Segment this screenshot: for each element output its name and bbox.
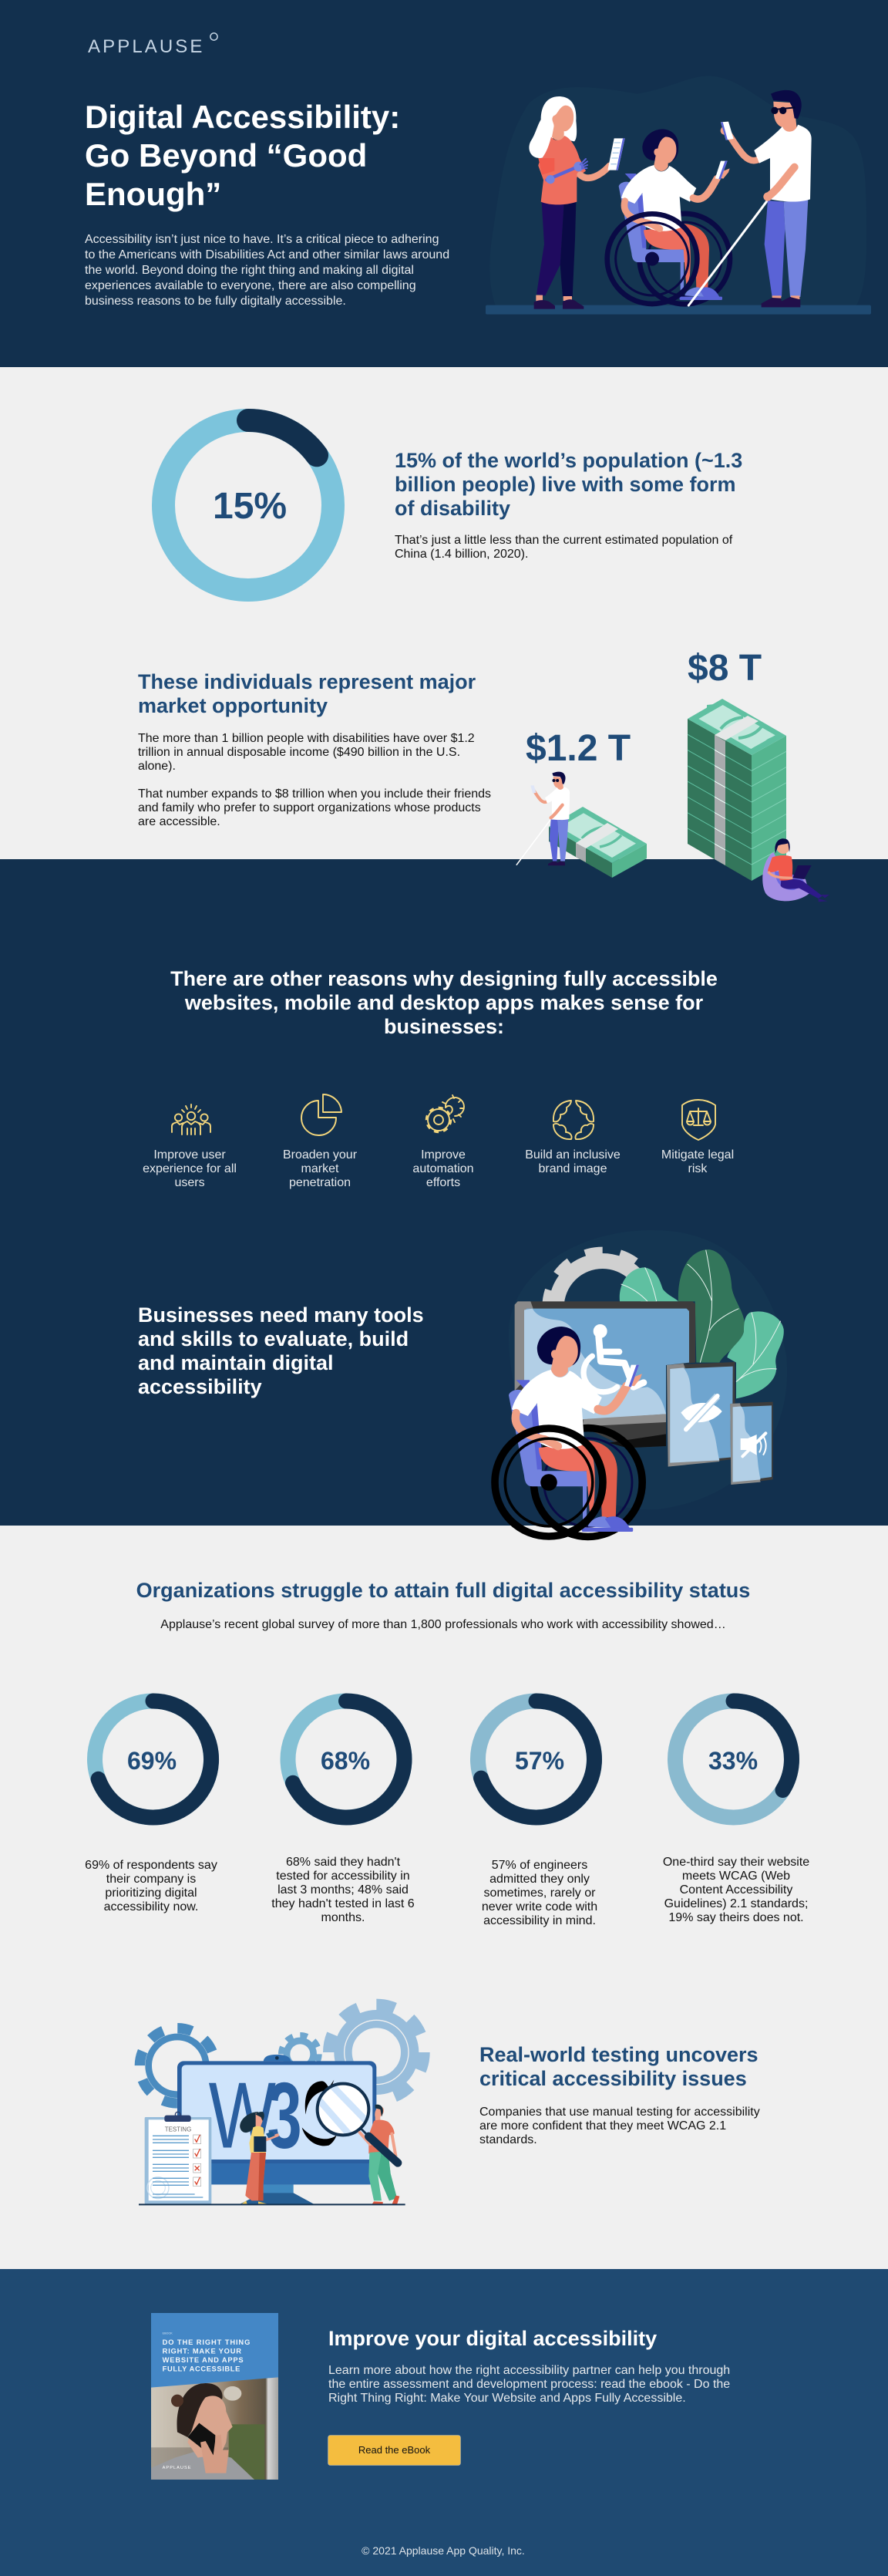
heading: tools and skills: accessibility: [138, 1375, 262, 1398]
figure: wheelchair user: [495, 1327, 642, 1536]
heading: market opportunity: market opportunity: [138, 694, 328, 717]
intro text: to the Americans with Disabilities Act and other similar laws around: [85, 248, 449, 261]
label: automation: Improve: [421, 1148, 466, 1162]
label: legal risk: [661, 1148, 734, 1175]
caption: 57%: [482, 1859, 597, 1927]
white cane: [688, 201, 767, 305]
heading: population: [395, 449, 742, 520]
heading: tools and skills: [138, 1303, 424, 1398]
caption: 57%: 57% of engineers: [492, 1859, 587, 1871]
illustration: small money stack: [549, 807, 647, 878]
label: user experience: [143, 1148, 237, 1189]
clipboard: TESTING: [165, 2126, 191, 2133]
gear: left: [140, 2028, 215, 2103]
text: manual testing: standards.: [479, 2133, 537, 2146]
heading: market opportunity: These individuals represent major: [138, 670, 476, 693]
background blob: [509, 1230, 787, 1509]
gear: middle: [281, 2035, 319, 2073]
label: brand image: [525, 1148, 621, 1175]
icon: eye slash: [681, 1403, 722, 1422]
icon: applause logo ring: [210, 33, 217, 40]
icon: shield with scales: [682, 1100, 715, 1140]
intro text: business reasons to be fully digitally accessible.: [85, 295, 346, 307]
logo: APPLAUSE: [88, 36, 205, 57]
icon: inclusive hands: [553, 1101, 594, 1139]
cover text: EBOOK: [163, 2332, 173, 2335]
donut chart: 68 percent: [288, 1701, 404, 1817]
panel: hero: [0, 0, 888, 367]
caption: 33%: Content Accessibility: [680, 1883, 792, 1896]
far wheel: [640, 214, 730, 304]
icon: gears: [426, 1095, 464, 1132]
man with magnifier: [360, 2105, 399, 2204]
illustration: W3C testing: [139, 2004, 424, 2204]
text: market opportunity: The more than 1 billion people with disabilities have over $1.2: [138, 731, 475, 745]
label: automation: efforts: [426, 1175, 460, 1189]
heading: improve your accessibility: Improve your digital accessibility: [328, 2327, 657, 2350]
near wheel: [607, 214, 697, 304]
caption: 57%: accessibility in mind.: [483, 1914, 596, 1927]
caption: 33%: 19% say theirs does not.: [668, 1911, 804, 1924]
text: manual testing: Companies that use manual testing for accessibility: [479, 2106, 760, 2118]
text: manual testing: [479, 2106, 760, 2146]
donut value: 33%: 33%: [708, 1747, 758, 1775]
ebook cover: FULLY ACCESSIBLE: [163, 2365, 240, 2373]
caption: 57%: never write code with: [482, 1900, 597, 1913]
magnifying glass: [316, 2082, 370, 2138]
heading: tools and skills: and maintain digital: [138, 1351, 334, 1374]
label: legal risk: Mitigate legal: [661, 1148, 734, 1162]
label: user experience: Improve user: [153, 1148, 226, 1162]
ebook cover: APPLAUSE: [163, 2466, 192, 2470]
label: brand image: Build an inclusive: [525, 1148, 621, 1162]
gear: right: [329, 2004, 424, 2100]
heading: organizations struggle: Organizations struggle to attain full digital accessibility status: [136, 1579, 750, 1602]
donut chart: 69 percent: [95, 1701, 211, 1818]
caption: 69%: accessibility now.: [104, 1900, 198, 1913]
value: $1.2 T: $1.2 T: [526, 728, 631, 769]
text: population comparison: That’s just a little less than the current estimated population of: [395, 534, 732, 546]
panel: call to action: [0, 2269, 888, 2576]
illustration: large money stack: [688, 699, 786, 881]
ebook cover: [151, 2313, 278, 2480]
label: user experience: users: [174, 1175, 205, 1189]
heading: real-world testing: [479, 2043, 758, 2090]
caption: 68%: last 3 months; 48% said: [278, 1883, 409, 1896]
heading: other reasons: There are other reasons why designing fully accessible: [170, 967, 718, 990]
label: automation: automation: [412, 1162, 474, 1175]
text: call to action: Right Thing Right: Make Your Website and Apps Fully Accessible.: [328, 2391, 686, 2405]
heading: other reasons: businesses:: [384, 1015, 504, 1038]
tablet: [667, 1362, 735, 1467]
label: market penetration: penetration: [289, 1175, 351, 1189]
label: user experience: experience for all: [143, 1162, 237, 1175]
title: Go Beyond “Good: [85, 137, 367, 173]
monitor: [177, 2055, 376, 2204]
woman with prosthetic arm: [529, 96, 625, 309]
donut value: 15%: 15%: [213, 486, 287, 527]
monitor: [515, 1301, 695, 1448]
button label: Read the eBook: [358, 2444, 430, 2456]
label: market penetration: market: [301, 1162, 338, 1175]
icon: pie chart: [301, 1094, 341, 1135]
icon: muted speaker: [741, 1435, 757, 1455]
label: market penetration: Broaden your: [283, 1148, 357, 1162]
caption: 68%: tested for accessibility in: [276, 1870, 410, 1882]
background blob: [489, 76, 866, 307]
monitor: 3: [267, 2062, 302, 2167]
heading: other reasons: websites, mobile and desktop apps makes sense for: [185, 991, 703, 1014]
intro text: the world. Beyond doing the right thing and making all digital: [85, 264, 414, 276]
text: market opportunity: [138, 731, 491, 828]
heading: tools and skills: and skills to evaluate, build: [138, 1327, 409, 1350]
text: survey intro: Applause’s recent global survey of more than 1,800 professionals who work with accessibility showed…: [160, 1618, 726, 1631]
caption: 69%: 69% of respondents say: [85, 1859, 217, 1871]
figure: woman on beanbag with laptop: [762, 838, 829, 902]
wheelchair user: [619, 129, 730, 300]
text: market opportunity: That number expands to $8 trillion when you include their friends: [138, 787, 491, 801]
ebook cover: RIGHT: MAKE YOUR: [163, 2348, 241, 2355]
intro text: Accessibility isn’t just nice to have. It’s a critical piece to adhering: [85, 233, 439, 245]
heading: market opportunity: [138, 670, 476, 717]
text: market opportunity: and family who prefer to support organizations whose products: [138, 801, 481, 814]
floor: [486, 305, 871, 315]
floor line: [139, 2202, 405, 2207]
heading: real-world testing: critical accessibility issues: [479, 2067, 747, 2090]
button: Read the eBook: [328, 2436, 461, 2465]
text: population comparison: [395, 534, 732, 560]
label: automation: [412, 1148, 474, 1189]
leaves: [620, 1249, 784, 1398]
caption: 69%: prioritizing digital: [105, 1886, 197, 1899]
caption: 57%: admitted they only: [489, 1873, 590, 1885]
intro text: experiences available to everyone, there are also compelling: [85, 279, 416, 292]
donut chart: 33 percent: [675, 1701, 792, 1817]
donut value: 57%: 57%: [515, 1747, 564, 1775]
caption: 68%: [271, 1856, 415, 1924]
panel: reasons: [0, 859, 888, 1526]
heading: population: billion people) live with some form: [395, 473, 736, 496]
text: call to action: Learn more about how the right accessibility partner can help you through: [328, 2363, 730, 2377]
man with cane: [721, 90, 812, 307]
heading: tools and skills: Businesses need many tools: [138, 1303, 424, 1327]
text: manual testing: are more confident that they meet WCAG 2.1: [479, 2119, 726, 2132]
donut chart: 15 percent: [163, 420, 333, 590]
caption: 33%: meets WCAG (Web: [682, 1870, 790, 1882]
caption: 69%: their company is: [106, 1873, 196, 1885]
value: $8 T: $8 T: [688, 648, 762, 689]
heading: population: 15% of the world’s population (~1.3: [395, 449, 742, 472]
caption: 68%: months.: [321, 1911, 365, 1924]
label: brand image: brand image: [539, 1162, 607, 1175]
reasons icons: [172, 1094, 715, 1140]
donut value: 69%: 69%: [127, 1747, 177, 1775]
title: Digital Accessibility:: [85, 99, 400, 134]
ebook cover: DO THE RIGHT THING: [163, 2338, 250, 2346]
small tablet: [730, 1402, 773, 1485]
footer: © 2021 Applause App Quality, Inc.: [362, 2544, 525, 2557]
caption: 33%: [663, 1856, 809, 1924]
gear: [547, 1252, 658, 1363]
illustration: devices and wheelchair user: [495, 1230, 787, 1536]
C swirl: [302, 2080, 337, 2146]
caption: 33%: Guidelines) 2.1 standards;: [664, 1897, 808, 1910]
icon: people: [172, 1104, 210, 1135]
figure: small man with cane: [516, 772, 570, 865]
caption: 69%: [85, 1859, 217, 1913]
caption: 33%: One-third say their website: [663, 1856, 809, 1868]
ebook cover: WEBSITE AND APPS: [163, 2356, 244, 2364]
caption: 68%: 68% said they hadn't: [286, 1856, 400, 1868]
text: population comparison: China (1.4 billion, 2020).: [395, 548, 528, 560]
title: [85, 99, 400, 211]
hero illustration: [486, 76, 871, 315]
label: legal risk: risk: [688, 1162, 707, 1175]
icon: accessibility symbol: [584, 1324, 644, 1392]
clipboard: [145, 2112, 211, 2204]
text: market opportunity: are accessible.: [138, 814, 220, 828]
W3 wordmark: W: [209, 2062, 276, 2167]
text: market opportunity: alone).: [138, 759, 176, 773]
intro text: [85, 233, 449, 307]
donut chart: 57 percent: [478, 1701, 594, 1817]
donut value: 68%: 68%: [321, 1747, 370, 1775]
title: Enough”: [85, 176, 221, 211]
heading: population: of disability: [395, 497, 510, 520]
woman with tablet: [240, 2112, 278, 2204]
cover photo: [151, 2375, 278, 2480]
text: call to action: [328, 2363, 730, 2405]
heading: real-world testing: Real-world testing uncovers: [479, 2043, 758, 2066]
text: call to action: the entire assessment and development process: read the ebook - Do the: [328, 2377, 730, 2391]
heading: other reasons: [170, 967, 718, 1038]
text: market opportunity: trillion in annual disposable income ($490 billion in the U.S.: [138, 745, 460, 759]
label: market penetration: [283, 1148, 357, 1189]
caption: 68%: they hadn't tested in last 6: [271, 1897, 415, 1910]
caption: 57%: sometimes, rarely or: [484, 1886, 595, 1899]
